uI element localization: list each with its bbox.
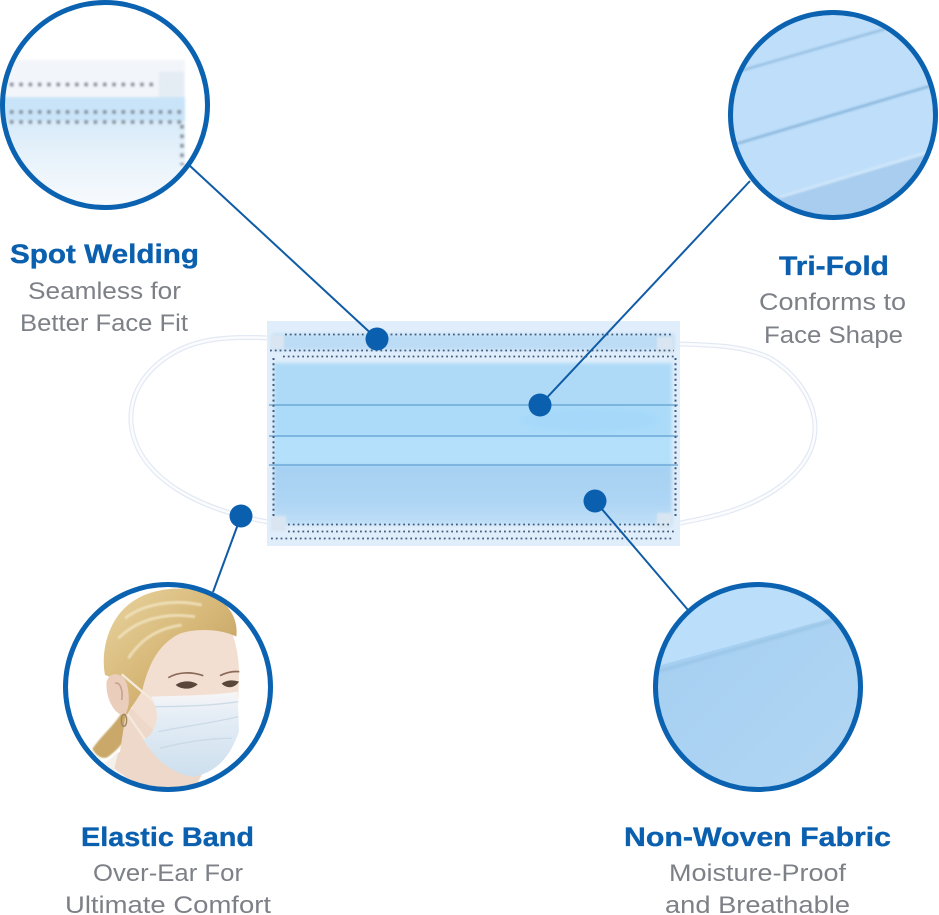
description line 1: Moisture-Proof bbox=[669, 860, 846, 887]
marker dots bbox=[230, 328, 606, 528]
circle: non-woven fabric close-up bbox=[650, 580, 863, 792]
neck and shoulders bbox=[105, 708, 202, 788]
ponytail bbox=[92, 712, 126, 759]
left ear loop bbox=[131, 337, 268, 522]
heading: Tri-Fold bbox=[779, 251, 889, 281]
face mask bbox=[143, 692, 239, 777]
heading: Elastic Band bbox=[81, 822, 254, 852]
heading: Spot Welding bbox=[10, 239, 199, 269]
ring bbox=[2, 2, 208, 208]
ring bbox=[656, 584, 860, 790]
description line 2: Better Face Fit bbox=[20, 310, 188, 337]
ring bbox=[730, 12, 936, 218]
face bbox=[132, 630, 239, 708]
mask product photo bbox=[131, 321, 815, 546]
circle: spot welding close-up bbox=[0, 0, 210, 211]
mask body bbox=[267, 321, 680, 546]
circle: tri-fold close-up bbox=[728, 10, 939, 225]
label: non-woven fabric bbox=[624, 822, 891, 915]
ear straps bbox=[122, 674, 153, 742]
description line 1: Over-Ear For bbox=[93, 860, 243, 887]
description line 2: Face Shape bbox=[764, 322, 903, 349]
description line 1: Conforms to bbox=[759, 289, 906, 316]
heading: Non-Woven Fabric bbox=[624, 822, 891, 852]
earring bbox=[121, 714, 127, 726]
hair bbox=[104, 589, 237, 715]
connector lines bbox=[189, 165, 750, 610]
label: tri-fold bbox=[759, 251, 906, 349]
circle: elastic band, woman wearing mask bbox=[60, 580, 275, 795]
weld points bbox=[271, 335, 673, 531]
ring bbox=[66, 584, 270, 790]
description line 1: Seamless for bbox=[28, 278, 181, 305]
fold lines bbox=[269, 405, 678, 465]
eyes and brows bbox=[168, 671, 239, 689]
label: elastic band bbox=[65, 822, 271, 915]
label: spot welding bbox=[10, 239, 199, 337]
stitching dots bbox=[270, 334, 674, 538]
right ear loop bbox=[680, 344, 815, 523]
ear bbox=[106, 674, 129, 715]
